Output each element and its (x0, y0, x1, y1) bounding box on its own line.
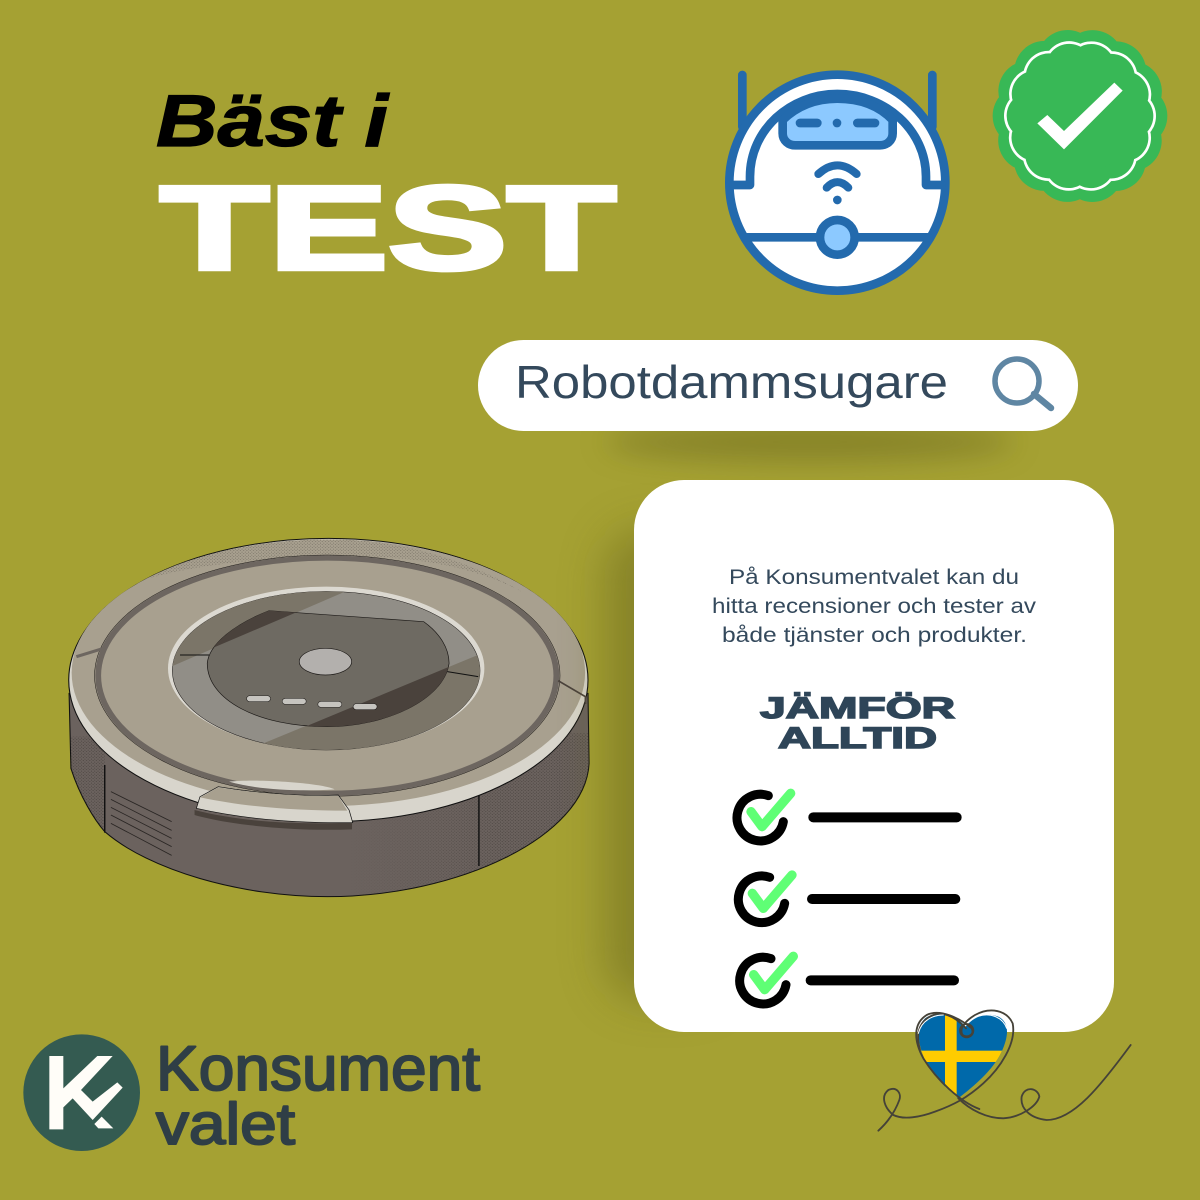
info card shadow (605, 530, 725, 1000)
panel: info card (634, 480, 1114, 1032)
control disk (206, 610, 450, 727)
search bar shadow (605, 422, 1015, 462)
logo wordmark: Konsument (156, 1034, 480, 1104)
icon: magnifying glass (995, 359, 1051, 408)
card description: hitta recensioner och tester av (712, 595, 1037, 618)
logo wordmark: valet (156, 1092, 295, 1157)
side vent (111, 792, 172, 855)
body side (69, 693, 589, 897)
card description: både tjänster och produkter. (722, 624, 1027, 647)
robot vacuum illustration (69, 538, 593, 900)
logo mark (23, 1034, 140, 1151)
logo wordmark (156, 1034, 480, 1157)
centre button (299, 648, 352, 675)
top disc rim (69, 538, 588, 822)
rim seams (76, 648, 104, 657)
centre well (168, 586, 484, 750)
check item 3 (740, 956, 954, 1004)
search bar (478, 340, 1078, 431)
logo: Konsumentvalet (23, 1034, 480, 1157)
title: Bäst i: Bäst i (156, 81, 390, 162)
heading: Jämför alltid: ALLTID (778, 722, 937, 755)
outer ring (98, 558, 556, 793)
check item 1 (737, 793, 957, 841)
icon: green verified badge (1008, 44, 1152, 188)
indicator buttons (247, 696, 377, 710)
heading: Jämför alltid: JÄMFÖR (760, 692, 956, 725)
body seams (105, 765, 479, 866)
front bumper (195, 781, 353, 830)
heading: Jämför alltid (760, 692, 956, 755)
icon: Swedish flag heart with scribble line (878, 1007, 1131, 1131)
icon: robot vacuum with wifi (729, 75, 945, 291)
title: TEST: TEST (160, 162, 616, 295)
card description: På Konsumentvalet kan du (729, 566, 1019, 589)
checklist (737, 793, 957, 1004)
search text: Robotdammsugare (515, 356, 948, 408)
check item 2 (738, 875, 955, 923)
card description (712, 566, 1037, 647)
